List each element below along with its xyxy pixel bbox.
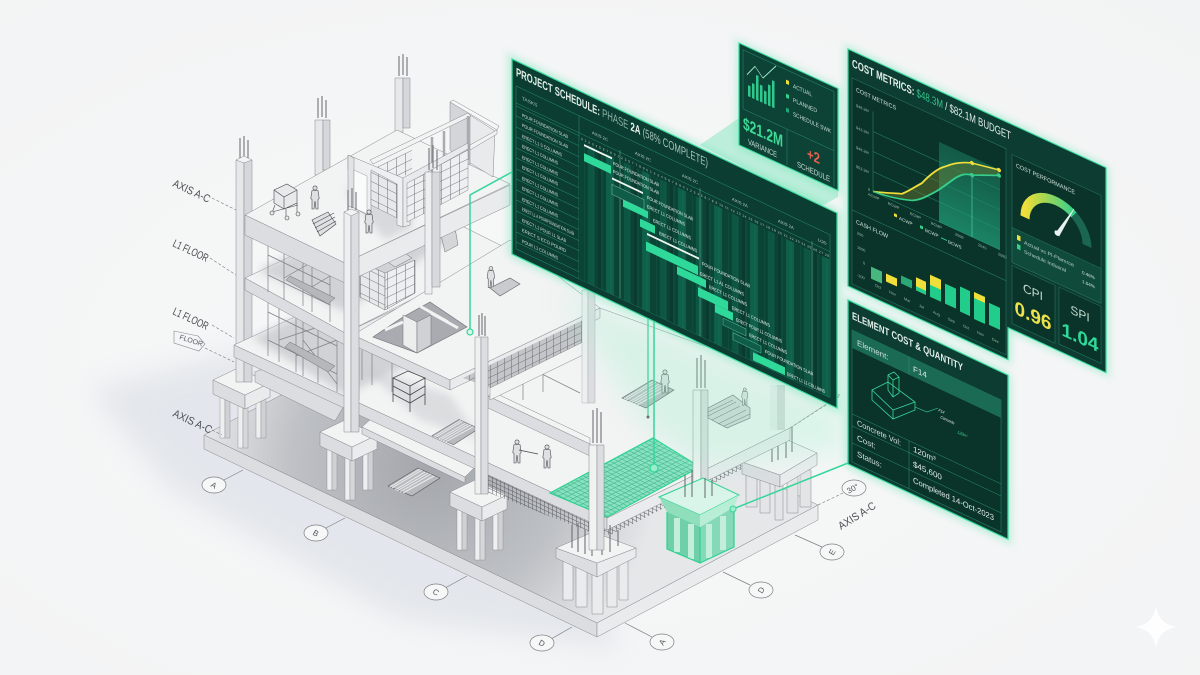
gantt bar labels: ERECT L1 L1 COLUMNS	[787, 372, 825, 395]
task list	[522, 96, 574, 269]
formwork panel rear	[377, 150, 412, 185]
connector lines	[467, 172, 848, 512]
schedule title: PROJECT SCHEDULE: PHASE 2A (58% COMPLETE)	[516, 65, 708, 170]
x axis labels: 2008	[955, 231, 964, 240]
cash flow axis: -100	[857, 272, 865, 281]
months: Nov	[889, 289, 896, 297]
top rail rear	[370, 113, 471, 164]
months: Oct	[875, 283, 882, 290]
cost performance subpanel	[1012, 154, 1101, 303]
x axis labels: ACWP	[868, 191, 880, 202]
formwork rack	[360, 250, 415, 310]
pile cap 3	[450, 480, 507, 560]
scaffold platform middle	[286, 276, 335, 304]
highlighted rebar slab	[550, 438, 700, 517]
legend box: Schedule Indusral	[1024, 249, 1066, 274]
ground shadow	[90, 350, 620, 650]
task list: ERECT L1 COLUMNS	[522, 197, 558, 220]
task list: ERECT L1 A POURFOUNDATION SLAB	[522, 207, 574, 237]
inner frame posts	[432, 116, 468, 175]
gauge	[1025, 186, 1087, 249]
task list: ERECT L1 COLUMNS	[522, 144, 558, 167]
CPI card: 0.96	[1015, 297, 1051, 335]
grid bubbles: D	[756, 585, 767, 595]
element table: Element:	[857, 338, 889, 362]
element table: Completed 14-Oct-2023	[913, 475, 994, 523]
timeline header: AXIS 2A	[732, 196, 748, 209]
cost metrics panel	[845, 45, 1109, 409]
gantt bar labels: POUR FOUNDATION SLAB	[765, 349, 813, 378]
task list: ERECT L1 COLUMNS	[522, 165, 558, 188]
y axis labels: $48.3M	[856, 145, 869, 155]
workers on upper slabs	[311, 186, 495, 287]
SPI card: SPI	[1070, 303, 1090, 325]
x axis labels: 2080	[998, 251, 1007, 260]
sparkle watermark	[1135, 606, 1177, 648]
x axis labels: BCMP	[910, 211, 921, 221]
scaffold middle tier	[268, 240, 340, 322]
mint glow beneath schedule	[560, 290, 850, 470]
column 5	[425, 145, 440, 294]
gantt bar labels: ERECT L1 A1 COLUMNS	[700, 271, 744, 298]
interior slab edge beam	[488, 392, 590, 456]
grid bubbles: A	[657, 637, 668, 647]
curve legend: BCWS	[948, 239, 961, 251]
footing wireframe	[872, 372, 938, 419]
footing callouts: 120m³	[957, 430, 969, 439]
label axis A-C lower: AXIS A-C	[171, 408, 214, 436]
task list: ERECT L1 S COLUMNS	[522, 134, 562, 159]
task list: POUR FOUNDATION SLAB	[522, 123, 568, 151]
area between curves	[873, 112, 999, 249]
label axis A-C top: AXIS A-C	[171, 178, 212, 206]
y axis labels: $48.3M	[856, 103, 869, 113]
formwork panel front left	[371, 170, 397, 218]
performance title: COST PERFORMANCE	[1016, 163, 1075, 196]
cash flow axis: 200	[857, 230, 864, 238]
months: Aug	[933, 309, 940, 317]
upper slab L2	[245, 200, 510, 345]
roof equipment cart	[270, 184, 300, 220]
gantt bar labels: POUR FOUNDATION SLAB	[613, 161, 659, 189]
pile cap 2	[320, 420, 377, 500]
schedule value: +2	[807, 146, 820, 168]
rail right	[470, 130, 497, 150]
task list: TASKS	[522, 96, 538, 109]
months: Dec	[992, 336, 999, 344]
pile cap 1	[213, 368, 270, 448]
workers on ground floor	[513, 440, 551, 468]
months	[875, 283, 999, 344]
rebar mesh under slab	[487, 425, 790, 535]
task list: POUR FOUNDATION SLAB	[522, 113, 568, 141]
timeline header: AXIS 2C	[635, 151, 652, 163]
cost curve subpanel	[852, 78, 1007, 281]
x axis labels	[868, 191, 1007, 260]
highlight band	[939, 142, 1000, 250]
column 1 left corner	[236, 136, 252, 382]
CPI card	[1012, 265, 1055, 343]
cash flow axis	[857, 230, 866, 281]
grid bubbles: D	[537, 638, 547, 649]
curve legend: ACWP	[899, 216, 912, 228]
subpanel title: COST METRICS	[856, 87, 896, 112]
curve legend	[894, 213, 961, 251]
grated opening under central slab	[463, 318, 587, 388]
lower main slab	[234, 250, 840, 530]
gantt bar labels: ERECT L1 COLUMNS	[709, 285, 747, 309]
column 6	[475, 313, 488, 494]
timeline header: AXIS 2C	[682, 173, 699, 185]
element cost and quantity panel	[845, 296, 1011, 545]
cost title: COST METRICS: $48.3M / $82.1M BUDGET	[852, 56, 1011, 143]
mini bar and line chart	[747, 53, 776, 109]
element table: 120m³	[913, 444, 936, 464]
curve markers	[970, 155, 1001, 190]
gantt bar labels: POUR FOUNDATION SLAB	[613, 169, 659, 197]
back columns lower	[352, 290, 785, 430]
column 7	[589, 408, 604, 550]
mini legend: PLANNED	[793, 97, 817, 115]
column 3	[395, 54, 410, 132]
stacked rebar bundle	[388, 468, 440, 496]
floor tag	[174, 331, 205, 351]
ground beam 2	[362, 418, 474, 483]
months: Nov	[977, 330, 984, 337]
ground beam 1	[255, 366, 345, 421]
x axis labels: BCMP	[931, 220, 942, 230]
cash flow bars	[871, 245, 1000, 338]
element table: Concrete Vol:	[857, 418, 901, 448]
doorway	[354, 170, 367, 214]
legend box: Actual vs Pl-Plamrce	[1024, 240, 1074, 269]
gantt bars	[584, 144, 785, 375]
label L1 floor lower: L1 FLOOR	[171, 306, 210, 333]
variance value: $21.2M	[743, 114, 783, 151]
highlighted pile cap	[659, 470, 739, 563]
months: Sep	[948, 316, 955, 324]
element title: ELEMENT COST & QUANTITY	[852, 310, 963, 374]
months: Jul	[919, 303, 924, 310]
timeline header: AXIS 2A	[778, 218, 794, 231]
footing callouts	[938, 408, 969, 439]
steel bundles on floor	[432, 278, 520, 445]
roof slab	[245, 130, 510, 283]
cash flow axis: 0	[863, 260, 866, 266]
label L1 floor upper: L1 FLOOR	[171, 238, 210, 265]
interior column right	[582, 290, 595, 403]
legend box	[1012, 227, 1101, 303]
grid bubbles: A	[209, 480, 219, 491]
gantt bar labels: POUR FOUNDATION SLAB	[647, 195, 693, 223]
column 2	[315, 96, 330, 175]
front pile cap	[556, 523, 636, 614]
y axis labels	[856, 103, 871, 192]
gantt bar labels: ERECT L1 COLUMNS	[647, 204, 685, 228]
scaffold platform lower	[285, 342, 335, 372]
variance label: VARIANCE	[748, 137, 777, 160]
small KPI panel	[736, 39, 841, 196]
months: Mar	[904, 296, 911, 304]
element table: Status:	[857, 449, 882, 470]
element table	[852, 330, 1001, 532]
task list: ERECT L1 COLUMNS	[522, 186, 558, 209]
grid bubbles	[202, 470, 844, 651]
task row lines	[516, 106, 579, 272]
foundation base slab	[204, 318, 818, 637]
gantt bar labels	[613, 161, 825, 395]
wall frame	[348, 143, 468, 227]
column 8	[693, 355, 708, 490]
central slab with opening	[353, 240, 600, 390]
gantt bar labels: ERECT L1 COLUMNS	[749, 333, 787, 356]
interior props and rack under central slab	[362, 350, 580, 400]
back right pile cap	[742, 425, 817, 520]
yellow curve	[873, 112, 999, 249]
cash flow subpanel	[852, 210, 1006, 355]
angle marker	[842, 480, 866, 496]
element table: $45,600	[913, 459, 942, 482]
scaffold lower tier	[268, 300, 337, 392]
gantt bar labels: ERECT L1 COLUMNS	[732, 305, 770, 329]
glow polygon behind small panel	[700, 118, 838, 207]
task list: POUR L1 COLUMNS	[522, 239, 558, 262]
task list: ERECT L1 POUR L1 SLAB	[522, 218, 566, 245]
task list: ERECT L1 COLUMNS	[522, 155, 558, 178]
column 4 front	[344, 188, 359, 432]
y axis labels: 0	[868, 186, 871, 192]
label axis A-C right: AXIS A-C	[836, 500, 878, 533]
cash flow title: CASH FLOW	[856, 219, 888, 240]
mini legend: ACTUAL	[793, 83, 812, 99]
strip beam below grate	[490, 340, 587, 400]
formwork panel front right	[407, 174, 425, 222]
CPI card: CPI	[1023, 281, 1043, 304]
back wall room	[450, 100, 499, 177]
green curve	[873, 118, 999, 249]
y axis labels: $53.3M	[856, 164, 869, 174]
legend box: 0.46%	[1082, 270, 1095, 282]
footing callouts: Concrete	[940, 415, 955, 425]
cash flow axis: 1000	[857, 244, 866, 253]
roof pallet	[312, 212, 336, 236]
gantt bar labels: POUR FOUNDATION SLAB	[702, 261, 750, 290]
building model	[202, 54, 844, 651]
timeline header: LOD	[818, 237, 827, 246]
x axis labels: 2040	[978, 242, 987, 251]
task list: ERECT L1 COLUMNS	[522, 176, 558, 199]
timeline header: AXIS 2C	[592, 130, 609, 143]
annotation labels	[171, 178, 878, 533]
element table: F14	[913, 364, 927, 380]
pipe bundle and stack near schedule	[622, 370, 750, 428]
grid bubbles: B	[311, 528, 320, 539]
mini legend	[786, 80, 832, 135]
element table: Cost:	[857, 433, 876, 451]
floor opening	[373, 302, 467, 353]
formwork panel right	[440, 150, 468, 205]
gantt bar labels: ERECT POUR L1 COLUMNS	[736, 317, 782, 345]
legend box: 1.04%	[1082, 279, 1095, 291]
panel body	[845, 296, 1011, 545]
gantt stripes	[579, 141, 830, 398]
wheeled equipment behind	[441, 228, 458, 252]
gantt bar labels: ERECT L1 COLUMNS	[653, 218, 691, 242]
curve legend: BCWP	[925, 228, 938, 240]
grid bubbles: E	[827, 548, 838, 557]
gantt bar labels: ERECT L1 COLUMNS	[659, 231, 697, 255]
SPI card	[1059, 287, 1101, 363]
leader lines	[205, 198, 843, 505]
floor tag: FLOOR	[178, 334, 203, 348]
y axis labels: $43.3M	[856, 125, 869, 135]
task list: ERECT S ECO POURD	[522, 228, 566, 255]
months: Oct	[963, 323, 970, 331]
footing callouts: F14	[938, 408, 945, 415]
grid bubbles: C	[431, 587, 441, 598]
angle marker: 30°	[845, 482, 860, 496]
SPI card: 1.04	[1062, 319, 1098, 357]
material rack	[393, 371, 425, 412]
timeline header: 0 1 2 3 4 5 6 7 8 0 1 2 3 5 7 7 8 9 0 1 2 3 4 5 6 7 8 9 0 1 2 3 4 5 6 7 8 9 10 11 12 13 14 15 16 17 18 19 20 21 22 23 24 25 26 27 28	[581, 137, 829, 258]
mini legend: SCHEDULE SWK	[793, 111, 832, 135]
x axis labels: BCWP	[888, 201, 900, 211]
schedule label: SCHEDULE	[797, 159, 830, 184]
project schedule panel	[508, 53, 841, 414]
